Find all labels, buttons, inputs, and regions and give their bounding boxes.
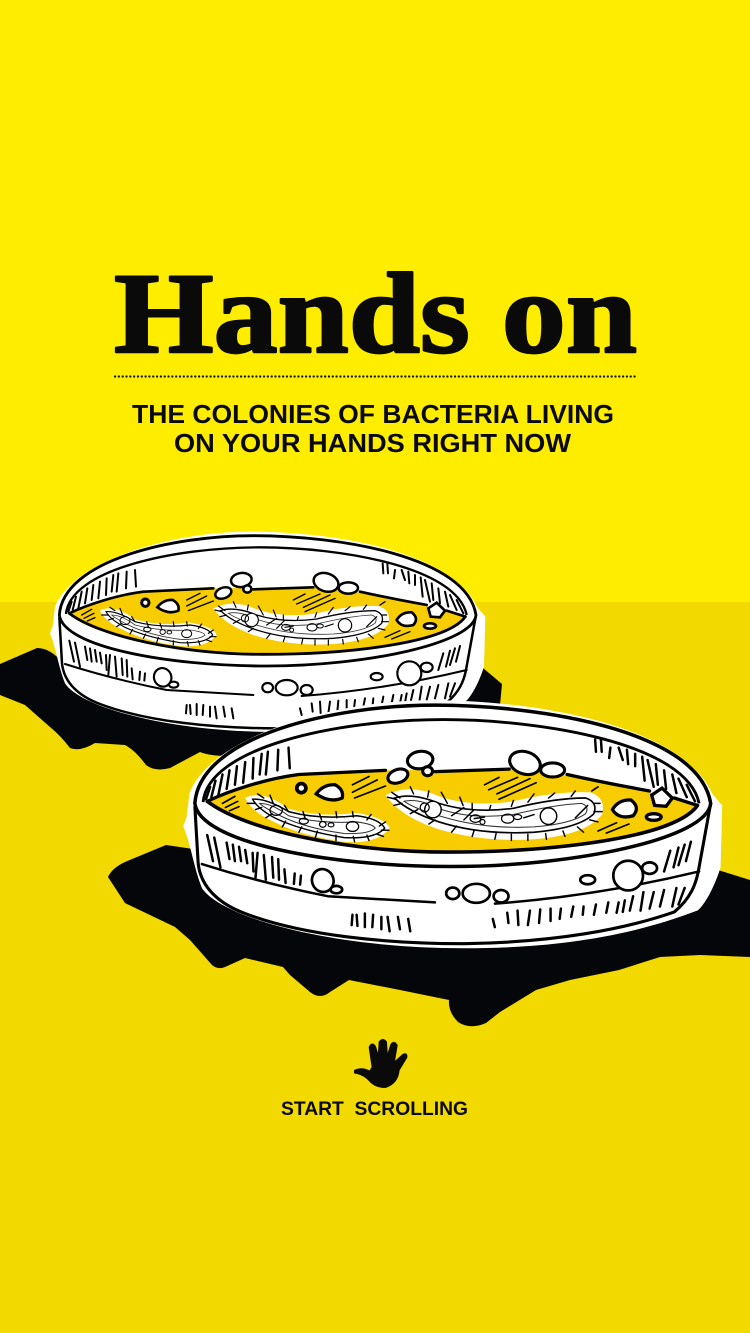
background upper wall [0,0,750,602]
bacterium right [213,602,389,645]
dish body side [59,615,476,728]
title: Hands on [114,250,637,377]
petri dish back [50,532,485,732]
subtitle: THE COLONIES OF BACTERIA LIVING [132,399,614,429]
subtitle: ON YOUR HANDS RIGHT NOW [174,428,571,458]
shadow of front dish [108,845,750,1026]
shadow of back dish [0,648,502,769]
agar back edge [69,587,465,617]
agar hatch marks [82,593,410,639]
agar medium [69,587,465,654]
lid seam [65,664,467,696]
bubbles on agar [142,599,445,629]
bacterium left [100,607,217,646]
dish white halo [50,532,485,732]
agar front edge [69,613,465,654]
icon: hand [355,1040,406,1087]
subtitle [132,399,614,458]
start scrolling label: START SCROLLING [281,1099,468,1120]
background lower table [0,602,750,1333]
inner rim line [66,547,467,615]
petri dish front [183,700,722,948]
dish rim and interior [59,536,476,666]
dotted divider [115,375,637,378]
bubbles on wall [214,570,358,601]
hatching [68,563,463,718]
bubbles on side [151,661,433,695]
